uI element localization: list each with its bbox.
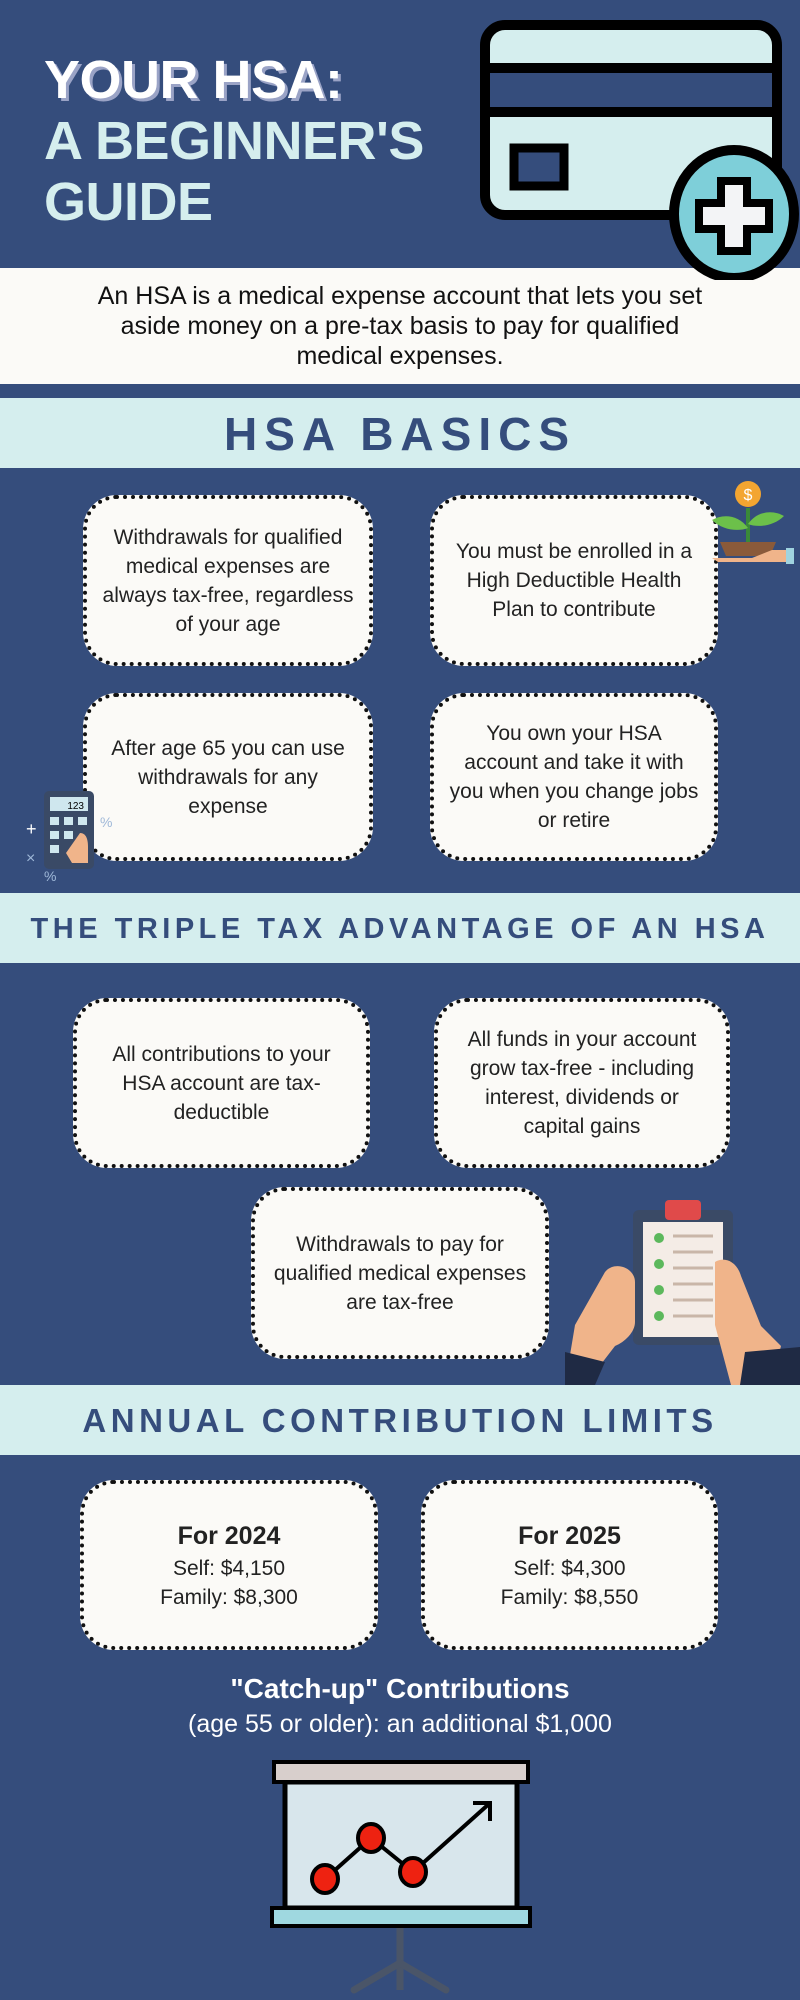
card: 2024 bbox=[80, 1480, 378, 1650]
card: own account: You own your HSA account and take it with you when you change jobs or retire bbox=[450, 722, 698, 832]
intro text: aside money on a pre-tax basis to pay for qualified bbox=[121, 312, 679, 340]
card: 2024: Self: $4,150 bbox=[173, 1557, 285, 1580]
card: 2025 bbox=[421, 1480, 718, 1650]
heading: annual contribution limits bbox=[0, 1385, 800, 1455]
card: age 65 bbox=[83, 693, 373, 861]
heading: HSA basics: HSA BASICS bbox=[224, 408, 576, 460]
intro text: medical expenses. bbox=[296, 342, 504, 370]
card: withdrawals: Withdrawals for qualified medical expenses are always tax-free, regardless of your age bbox=[103, 526, 353, 636]
icon: plant in hand: $ bbox=[744, 487, 753, 504]
catch-up text: (age 55 or older): an additional $1,000 bbox=[188, 1710, 612, 1738]
card: age 65: After age 65 you can use withdrawals for any expense bbox=[111, 736, 345, 818]
heading: annual contribution limits: ANNUAL CONTRIBUTION LIMITS bbox=[82, 1402, 718, 1439]
card: contributions: All contributions to your HSA account are tax-deductible bbox=[112, 1042, 331, 1124]
icon: calculator: 123 bbox=[67, 801, 84, 812]
card: withdrawals bbox=[251, 1187, 549, 1359]
intro text: An HSA is a medical expense account that lets you set bbox=[98, 282, 702, 310]
card: withdrawals bbox=[83, 495, 373, 666]
panel: limits cards bbox=[80, 1480, 718, 1650]
icon: credit card with plus bbox=[480, 20, 799, 280]
card: growth: All funds in your account grow tax-free - including interest, dividends or capital gains bbox=[468, 1028, 696, 1138]
intro text bbox=[0, 268, 800, 384]
card: growth bbox=[434, 998, 730, 1168]
title bbox=[44, 50, 424, 232]
icon: calculator: % bbox=[44, 868, 56, 884]
icon: calculator bbox=[26, 791, 112, 884]
icon: presentation easel chart bbox=[270, 1760, 532, 1994]
icon: plant in hand bbox=[712, 481, 794, 564]
icon: clipboard with hands bbox=[565, 1200, 800, 1385]
panel: basics cards bbox=[83, 495, 718, 861]
catch-up text bbox=[188, 1673, 612, 1738]
card: HDHP bbox=[430, 495, 718, 666]
card: 2024: Family: $8,300 bbox=[160, 1586, 298, 1609]
heading: triple tax advantage bbox=[0, 893, 800, 963]
icon: calculator: % bbox=[100, 814, 112, 830]
card: 2025: Family: $8,550 bbox=[501, 1586, 638, 1609]
card: 2025: Self: $4,300 bbox=[513, 1557, 626, 1580]
title: GUIDE bbox=[44, 172, 213, 232]
catch-up text: "Catch-up" Contributions bbox=[230, 1673, 570, 1704]
header bbox=[0, 0, 800, 268]
card: contributions bbox=[73, 998, 370, 1168]
card: 2025: For 2025 bbox=[518, 1522, 621, 1550]
title: YOUR HSA: bbox=[44, 50, 343, 110]
icon: calculator: + bbox=[26, 819, 37, 839]
icon: calculator: × bbox=[26, 850, 35, 867]
title: A BEGINNER'S bbox=[44, 111, 424, 171]
heading: triple tax advantage: THE TRIPLE TAX ADVANTAGE OF AN HSA bbox=[31, 913, 769, 945]
card: HDHP: You must be enrolled in a High Deductible Health Plan to contribute bbox=[456, 540, 692, 621]
panel: triple tax cards bbox=[73, 998, 730, 1359]
card: 2024: For 2024 bbox=[178, 1522, 280, 1550]
heading: HSA basics bbox=[0, 398, 800, 468]
card: withdrawals: Withdrawals to pay for qualified medical expenses are tax-free bbox=[274, 1232, 526, 1314]
card: own account bbox=[430, 693, 718, 861]
